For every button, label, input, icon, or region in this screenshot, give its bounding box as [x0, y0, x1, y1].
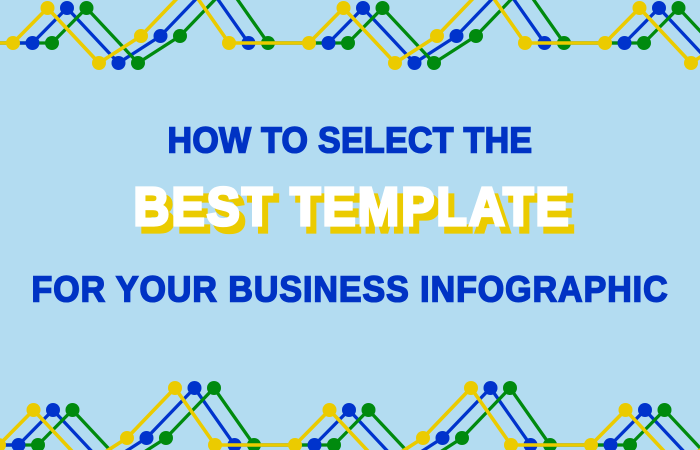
bottom line chart band: [0, 381, 700, 450]
heading line 2 shadow: BEST TEMPLATE: [140, 183, 575, 243]
heading line 3: FOR YOUR BUSINESS INFOGRAPHIC: [32, 269, 668, 310]
heading line 1: HOW TO SELECT THE: [168, 120, 532, 161]
top line chart band: [0, 0, 700, 70]
heading line 2: BEST TEMPLATE: [134, 176, 569, 236]
